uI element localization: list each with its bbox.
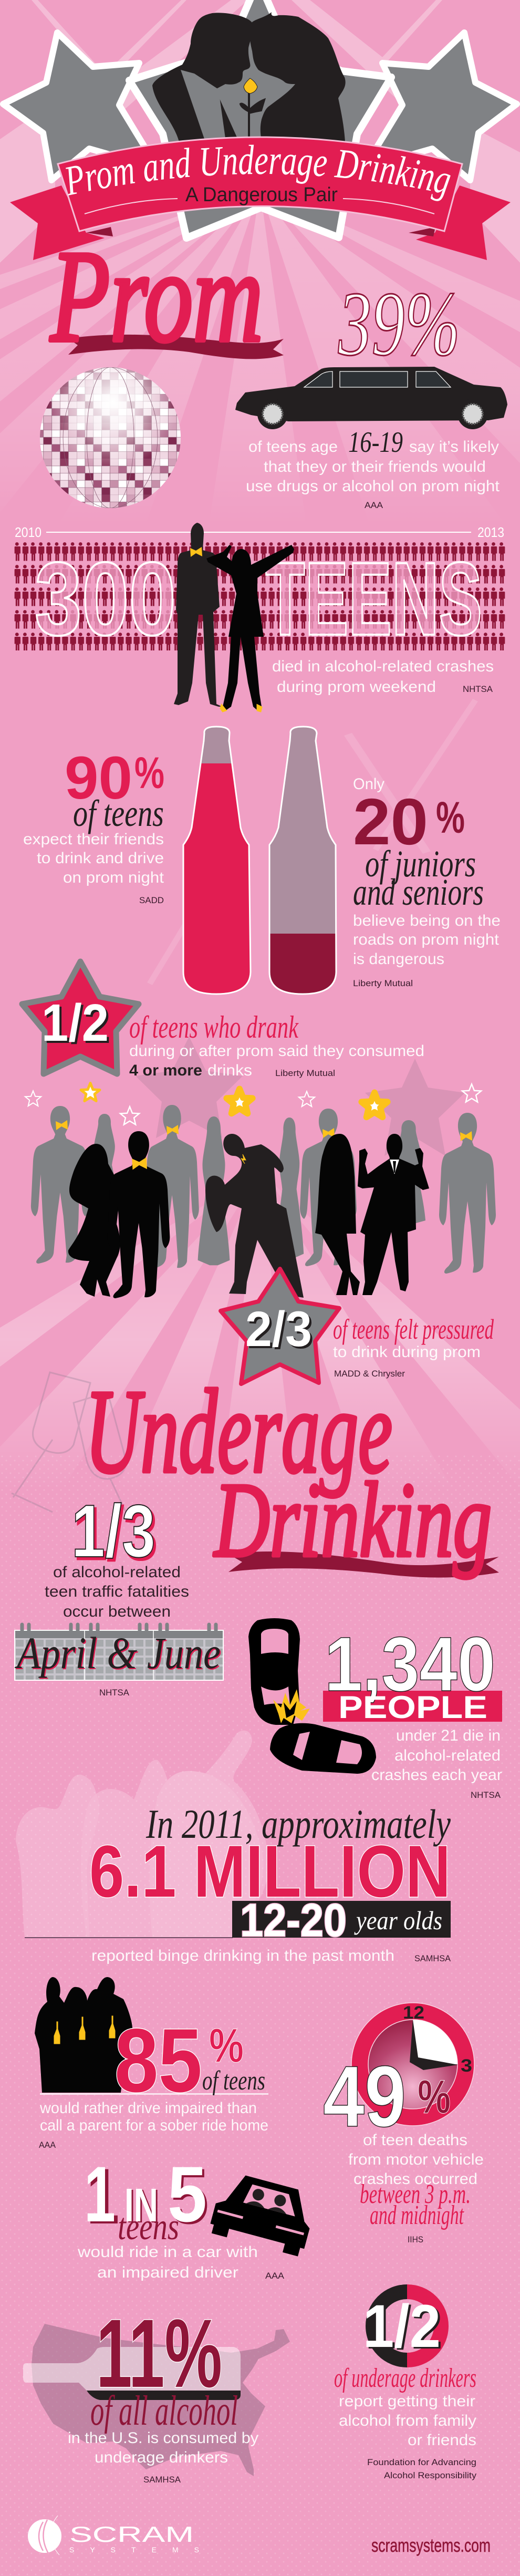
stat: 90 percent: on prom night bbox=[63, 869, 164, 886]
dancing woman right bbox=[315, 1134, 360, 1295]
stat: 49 percent clock: crashes occurred bbox=[353, 2170, 477, 2188]
stat: one third: occur between bbox=[63, 1603, 171, 1620]
gray crowd bbox=[31, 1105, 496, 1274]
stat: 85 percent: % bbox=[209, 2019, 244, 2073]
dancing man right bbox=[358, 1134, 429, 1295]
limo caption: of teens age bbox=[248, 438, 338, 456]
caption bbox=[272, 658, 494, 696]
stat: 1,340 people: alcohol-related bbox=[394, 1747, 501, 1764]
stat: one half star: of teens who drank bbox=[129, 1010, 299, 1044]
stat: 49 percent clock: IIHS bbox=[408, 2234, 423, 2244]
300 teens outline text: 300 bbox=[35, 541, 176, 657]
stat: 6.1 million: SAMHSA bbox=[414, 1953, 451, 1963]
map: United States bbox=[32, 2324, 290, 2476]
pale drinkers silhouette bbox=[16, 1731, 268, 1938]
age bar bbox=[232, 1901, 451, 1938]
stat: 90 percent bbox=[23, 744, 164, 905]
disco ball bbox=[40, 367, 181, 508]
stat: 11 percent: underage drinkers bbox=[95, 2449, 228, 2466]
stat: 85 percent: of teens bbox=[202, 2066, 265, 2096]
stat: 49 percent clock: between 3 p.m. bbox=[360, 2179, 471, 2209]
stat: 1 in 5: an impaired driver bbox=[97, 2264, 238, 2281]
decorative stars above crowd bbox=[25, 1083, 481, 1124]
base line bbox=[25, 1937, 233, 1938]
people grid bbox=[13, 542, 505, 650]
heading: Prom: Prom bbox=[50, 224, 263, 369]
stat: 49 percent clock bbox=[323, 2003, 484, 2244]
bottle 90 percent bbox=[183, 726, 251, 995]
stat: one half ring: Alcohol Responsibility bbox=[384, 2470, 477, 2480]
icon: limousine bbox=[235, 367, 507, 429]
icon: gray star bbox=[221, 1269, 339, 1384]
icon: rose bbox=[241, 78, 264, 138]
man shirt bbox=[181, 70, 226, 142]
stat: two thirds star bbox=[221, 1269, 494, 1384]
stat: 11 percent: of all alcohol bbox=[90, 2388, 238, 2434]
stat: 1,340 people: crashes each year bbox=[371, 1766, 502, 1784]
background light rays: lower fan bbox=[0, 1172, 520, 1487]
calendar: April & June bbox=[15, 1628, 221, 1678]
stat: 1 in 5: 5 bbox=[170, 2152, 209, 2240]
crowd silhouettes bbox=[31, 1105, 496, 1298]
stat: 20 percent: believe being on the bbox=[353, 912, 501, 929]
caption: died in alcohol-related crashes bbox=[272, 658, 494, 675]
stat: 20 percent: of juniors bbox=[365, 843, 476, 885]
stat: 85 percent bbox=[35, 1977, 268, 2150]
calendar: April & June bbox=[16, 1629, 222, 1679]
stat: one half star: 1/2 bbox=[41, 994, 109, 1052]
stat: one half star: 1/2 bbox=[44, 996, 111, 1054]
stat: 6.1 million bbox=[25, 1801, 451, 1964]
stat: 20 percent: Liberty Mutual bbox=[353, 978, 413, 988]
stat: 39 percent bbox=[235, 273, 507, 510]
stat: one half star bbox=[22, 961, 424, 1079]
stat: one half ring: alcohol from family bbox=[339, 2412, 476, 2429]
crash burst bbox=[273, 1689, 310, 1723]
stat: 85 percent: AAA bbox=[39, 2140, 56, 2150]
stat: two thirds star: 2/3 bbox=[245, 1301, 312, 1357]
background dot texture bbox=[0, 1455, 520, 2576]
stat: one third: 1/3 bbox=[71, 1489, 155, 1573]
stat: one half ring: 1/2 bbox=[365, 2294, 443, 2362]
timeline: 2010 bbox=[15, 524, 41, 540]
left star bbox=[3, 33, 158, 180]
stat: 6.1 million: 6.1 MILLION bbox=[89, 1830, 451, 1912]
people bar bbox=[323, 1691, 502, 1722]
heading ribbon bbox=[228, 1551, 499, 1578]
stat: 11 percent: SAMHSA bbox=[143, 2475, 181, 2485]
stat: 90 percent: SADD bbox=[139, 895, 164, 905]
title text bbox=[68, 174, 453, 195]
stat: one third: 1/3 bbox=[74, 1492, 158, 1576]
stat: one half ring bbox=[334, 2292, 477, 2480]
stat: 1 in 5: IN bbox=[124, 2179, 158, 2232]
stat: 6.1 million: reported binge drinking in the past month bbox=[91, 1947, 394, 1964]
stat: one third bbox=[15, 1489, 223, 1698]
heading: Underage Drinking bbox=[85, 1365, 499, 1579]
icon: wine bottle bbox=[23, 2347, 241, 2400]
lower car bbox=[270, 1723, 376, 1774]
stat: 90 percent: expect their friends bbox=[23, 831, 164, 848]
stat: 90 percent: 90 bbox=[65, 744, 132, 812]
stat: one half star: during or after prom said they consumed bbox=[129, 1042, 424, 1060]
limo caption: 16-19 bbox=[348, 426, 403, 459]
stat: 20 percent: Only bbox=[353, 775, 384, 793]
center star bbox=[129, 0, 391, 238]
stat: 1,340 people: under 21 die in bbox=[396, 1727, 501, 1744]
stat: 1 in 5: 1 bbox=[87, 2152, 119, 2240]
icon: tilted car with passengers bbox=[208, 2170, 319, 2258]
stat: one half ring: Foundation for Advancing bbox=[367, 2457, 476, 2467]
limo caption: AAA bbox=[365, 500, 383, 510]
stat: 11 percent bbox=[23, 2300, 290, 2485]
icon: car crash bbox=[248, 1618, 376, 1774]
stat: 1 in 5: teens bbox=[118, 2206, 179, 2248]
right star bbox=[364, 33, 517, 180]
stat: 90 percent: % bbox=[134, 748, 164, 798]
stat: 1,340 people: 1,340 bbox=[325, 1621, 495, 1708]
stat: 85 percent: 85 bbox=[115, 2010, 202, 2111]
gray crowd bow ties bbox=[56, 1120, 472, 1141]
timeline: 2013 bbox=[477, 524, 504, 540]
stat: one third: NHTSA bbox=[99, 1688, 130, 1698]
stat: one half star: Liberty Mutual bbox=[275, 1068, 335, 1078]
logo: SCRAM Systems: SYSTEMS bbox=[69, 2546, 215, 2554]
limo caption bbox=[246, 426, 500, 510]
stat: one half ring: report getting their bbox=[339, 2393, 475, 2410]
stat: 20 percent: is dangerous bbox=[353, 950, 444, 968]
couple silhouette bbox=[174, 523, 294, 711]
stat: 6.1 million: 12-20 bbox=[240, 1894, 347, 1946]
ribbon tails bbox=[10, 185, 105, 260]
stat: 6.1 million: In 2011, approximately bbox=[145, 1801, 451, 1847]
heading ribbon bbox=[68, 335, 284, 359]
stat: 6.1 million: year olds bbox=[354, 1906, 442, 1935]
stat: one third: of alcohol-related bbox=[53, 1564, 181, 1581]
stat: 20 percent: roads on prom night bbox=[353, 931, 500, 948]
icon: red star bbox=[22, 961, 139, 1074]
icon: two bottles bbox=[183, 726, 337, 995]
stat: 49 percent clock: % bbox=[418, 2071, 451, 2124]
stat: one half star: drinks bbox=[207, 1062, 252, 1079]
faint background stars bbox=[136, 1037, 465, 1156]
icon: clock bbox=[351, 2003, 474, 2126]
stat: 85 percent: call a parent for a sober ride home bbox=[40, 2117, 268, 2134]
stat: 39 percent: 39% bbox=[338, 273, 460, 375]
logo mark bbox=[28, 2516, 61, 2555]
stat: 20 percent: 20 bbox=[353, 785, 428, 858]
stat: 1 in 5: 5 bbox=[168, 2150, 207, 2238]
stat: one third: teen traffic fatalities bbox=[45, 1583, 189, 1600]
limo caption: say it’s likely bbox=[409, 438, 499, 456]
dancing couple left bbox=[68, 1131, 170, 1298]
stat: 11 percent: in the U.S. is consumed by bbox=[68, 2429, 258, 2447]
top car bbox=[248, 1618, 300, 1725]
stat: 49 percent clock: of teen deaths bbox=[363, 2132, 467, 2149]
stat: 1 in 5: IN bbox=[126, 2180, 160, 2233]
stat: 1,340 people bbox=[323, 1621, 502, 1800]
icon: clinking wine glasses bbox=[12, 1372, 131, 1524]
stat: two thirds star: MADD & Chrysler bbox=[334, 1369, 405, 1379]
stat: two thirds star: 2/3 bbox=[247, 1303, 314, 1359]
stat: 1 in 5: would ride in a car with bbox=[77, 2243, 258, 2261]
baseline bbox=[40, 2093, 268, 2095]
stat: 49 percent clock: 49 bbox=[323, 2048, 406, 2145]
stat: 11 percent: 11% bbox=[96, 2300, 222, 2408]
logo: SCRAM Systems bbox=[28, 2516, 215, 2555]
logo: SCRAM Systems: SCRAM bbox=[69, 2522, 194, 2547]
bottle 20 percent bbox=[269, 726, 337, 995]
couple silhouette: man bbox=[152, 13, 252, 142]
stat: 1,340 people: PEOPLE bbox=[338, 1690, 487, 1725]
stat: 300 teens bbox=[13, 523, 505, 711]
background light rays: upper fan bbox=[0, 189, 520, 552]
background light beams: title bbox=[0, 0, 520, 263]
stat: one half star: 4 or more bbox=[129, 1062, 202, 1079]
stat: 1 in 5: AAA bbox=[265, 2271, 285, 2281]
300 teens outline text bbox=[35, 541, 482, 657]
dancing couple center bbox=[205, 1134, 304, 1298]
background sparkle beams bbox=[147, 699, 478, 985]
icon: clock: 3 bbox=[461, 2056, 472, 2076]
caption: NHTSA bbox=[463, 684, 493, 694]
stat: 20 percent bbox=[353, 775, 501, 988]
limo caption: use drugs or alcohol on prom night bbox=[246, 478, 500, 495]
stat: 1 in 5: 1 bbox=[84, 2150, 116, 2238]
subtitle: A Dangerous Pair bbox=[185, 184, 338, 206]
title hero bbox=[0, 0, 520, 260]
icon: clock: 12 bbox=[403, 2003, 424, 2023]
stat: one half ring: or friends bbox=[408, 2432, 476, 2449]
stat: 1 in 5 bbox=[77, 2150, 319, 2281]
icon: half ring bbox=[373, 2292, 441, 2360]
title hero: Prom and Underage Drinking bbox=[66, 145, 451, 201]
timeline bbox=[15, 524, 504, 540]
limo caption: that they or their friends would bbox=[264, 458, 486, 475]
stat: 85 percent: would rather drive impaired than bbox=[39, 2099, 257, 2117]
stat: one half ring: 1/2 bbox=[363, 2293, 441, 2360]
couple silhouette: woman bbox=[249, 12, 346, 142]
stat: 90 percent: to drink and drive bbox=[37, 850, 164, 867]
teens with bottles silhouette bbox=[35, 1977, 132, 2093]
ribbon main bbox=[58, 137, 462, 231]
stat: two thirds star: to drink during prom bbox=[333, 1343, 481, 1361]
stat: 49 percent clock: and midnight bbox=[370, 2200, 464, 2230]
stat: 49 percent clock: from motor vehicle bbox=[348, 2151, 484, 2168]
caption: during prom weekend bbox=[277, 678, 436, 696]
stat: 90 percent: of teens bbox=[73, 792, 164, 834]
stat: 20 percent: % bbox=[436, 793, 465, 842]
stat: 1,340 people: NHTSA bbox=[471, 1790, 501, 1800]
